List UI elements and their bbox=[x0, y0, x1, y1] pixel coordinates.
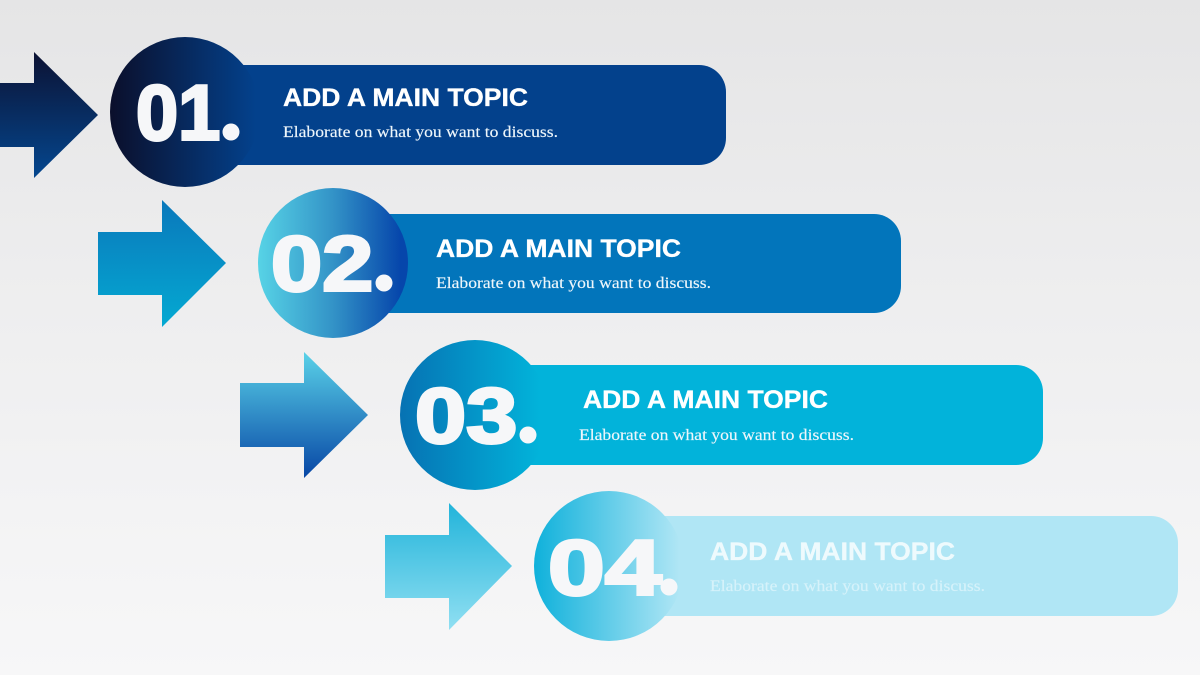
step 1 bbox=[0, 37, 726, 187]
body text 3: Elaborate on what you want to discuss. bbox=[579, 427, 854, 444]
heading 3: ADD A MAIN TOPIC bbox=[583, 386, 828, 414]
number 03: 03 bbox=[415, 373, 517, 460]
number circle 2 bbox=[258, 188, 408, 338]
bar 2 bbox=[333, 214, 901, 313]
arrow 4 bbox=[385, 503, 512, 630]
number circle 3 bbox=[400, 340, 550, 490]
arrow 2 bbox=[98, 200, 226, 327]
heading 4: ADD A MAIN TOPIC bbox=[710, 538, 955, 566]
heading 2: ADD A MAIN TOPIC bbox=[436, 235, 681, 263]
number circle 1 bbox=[110, 37, 260, 187]
number 04: 04 bbox=[548, 525, 662, 612]
arrow 1 bbox=[0, 52, 98, 178]
heading 1: ADD A MAIN TOPIC bbox=[283, 84, 528, 112]
bar 3 bbox=[475, 365, 1043, 465]
step 2 bbox=[98, 188, 901, 338]
number circle 4 bbox=[534, 491, 684, 641]
number 01: 01 bbox=[136, 69, 220, 157]
body text 2: Elaborate on what you want to discuss. bbox=[436, 275, 711, 292]
bar 1 bbox=[185, 65, 726, 165]
step 4 bbox=[385, 491, 1178, 641]
body text 4: Elaborate on what you want to discuss. bbox=[710, 578, 985, 595]
arrow 3 bbox=[240, 352, 368, 478]
body text 1: Elaborate on what you want to discuss. bbox=[283, 124, 558, 141]
step 3 bbox=[240, 340, 1043, 490]
number 02: 02 bbox=[271, 221, 373, 308]
bar 4 bbox=[610, 516, 1178, 616]
